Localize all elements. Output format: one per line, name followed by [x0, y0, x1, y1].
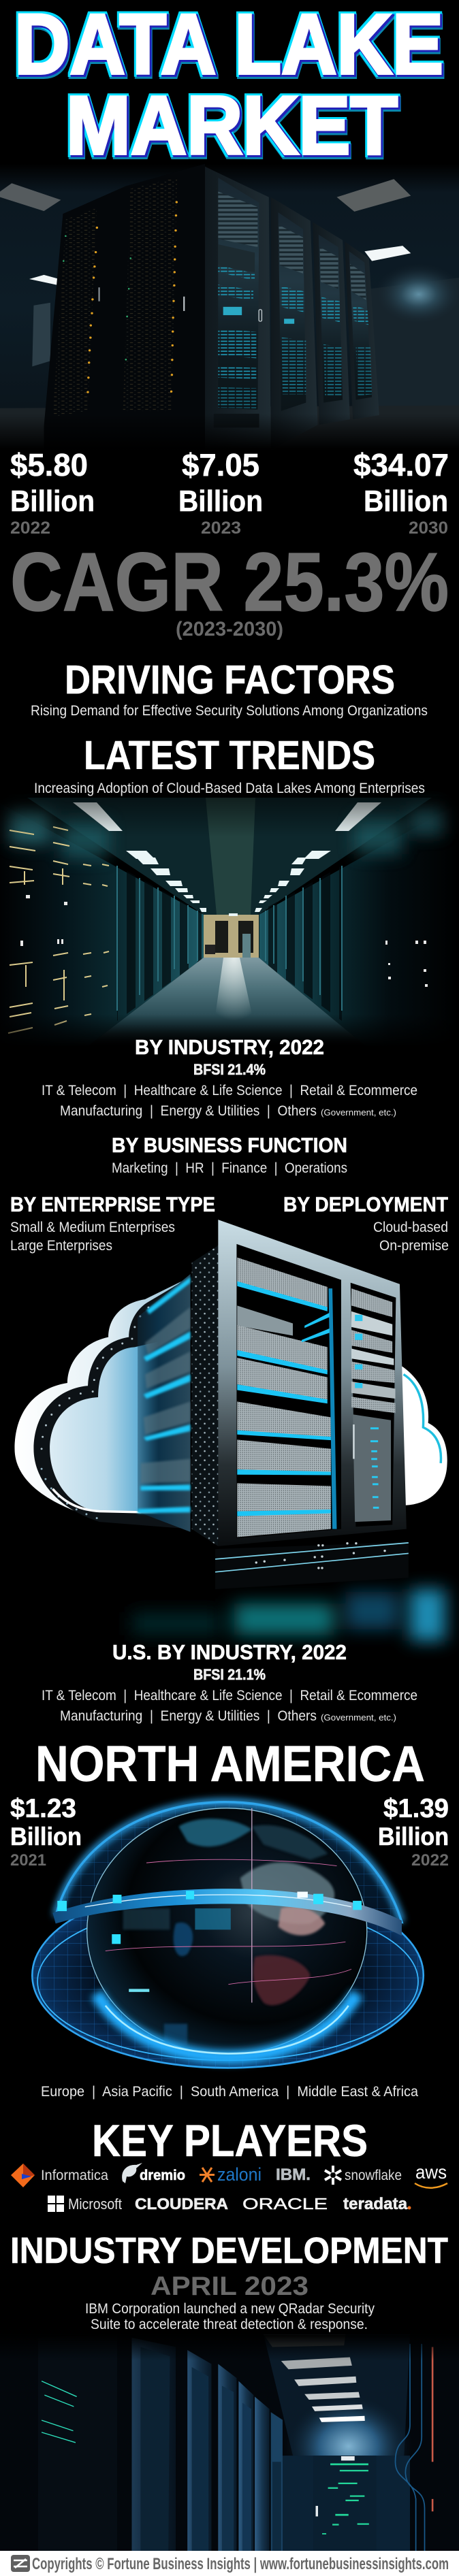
by enterprise type: BY ENTERPRISE TYPE: [10, 1192, 215, 1216]
industry development: Suite to accelerate threat detection & response.: [91, 2317, 368, 2332]
U.S. by industry 2022: U.S. BY INDUSTRY, 2022: [112, 1640, 347, 1664]
stat: 2023 market size: 2023: [201, 519, 241, 538]
stat: 2022 market size: $5.80: [10, 447, 88, 483]
logo: Snowflake: snowflake: [345, 2168, 402, 2183]
by business function: BY BUSINESS FUNCTION: [112, 1133, 347, 1157]
bottom image: server aisle: [0, 2334, 459, 2551]
rack column lines: [117, 866, 342, 1011]
teal glow on rack tops: [10, 806, 443, 858]
stat: 2022 north america: $1.39: [383, 1794, 449, 1823]
logo: Cloudera: CLOUDERA: [135, 2195, 228, 2213]
logo: Informatica: Informatica: [41, 2168, 108, 2183]
by industry 2022: Manufacturing | Energy & Utilities | Others: [60, 1103, 317, 1119]
left cloud: [15, 1277, 191, 1529]
by industry 2022: BY INDUSTRY, 2022: [135, 1035, 324, 1059]
illustration: cloud and server rack: [15, 1220, 447, 1641]
logo: AWS: aws: [415, 2162, 447, 2183]
illustration: holographic globe: [32, 1802, 424, 2068]
stat: 2021 north america: $1.23: [10, 1794, 76, 1823]
logo: Informatica: [11, 2164, 108, 2187]
amber rack LEDs: [8, 827, 109, 1033]
stat: 2022 market size: Billion: [10, 485, 95, 518]
server side depth: [138, 1274, 191, 1532]
by industry 2022: (Government, etc.): [321, 1107, 396, 1118]
rack 2: [271, 197, 318, 450]
stat: 2022 north america: [378, 1794, 449, 1870]
by industry 2022: IT & Telecom | Healthcare & Life Science | Retail & Ecommerce: [42, 1083, 417, 1098]
rear rack door: [313, 2456, 377, 2551]
hero image: server racks room: [0, 164, 459, 450]
stat: 2030 market size: Billion: [364, 485, 448, 518]
latest trends: [34, 733, 425, 796]
stat: 2030 market size: $34.07: [353, 447, 449, 483]
U.S. by industry 2022: BFSI 21.1%: [193, 1666, 266, 1683]
stat: 2023 market size: Billion: [178, 485, 263, 518]
stat: 2022 market size: [10, 447, 95, 538]
U.S. by industry 2022: IT & Telecom | Healthcare & Life Science | Retail & Ecommerce: [42, 1688, 417, 1703]
logo: zaloni: [200, 2164, 262, 2185]
racks: [38, 2334, 283, 2551]
by enterprise type: Large Enterprises: [10, 1238, 112, 1254]
stat: 2021 north america: Billion: [10, 1823, 82, 1851]
title: Data Lake Market: MARKET: [66, 79, 398, 172]
industry development: [10, 2230, 448, 2332]
ceiling lights: [73, 802, 381, 916]
stat: 2023 market size: $7.05: [182, 447, 259, 483]
driving factors: DRIVING FACTORS: [65, 657, 395, 702]
stat: 2022 market size: 2022: [10, 519, 50, 538]
stat: 2021 north america: [10, 1794, 82, 1870]
by deployment: [283, 1192, 449, 1254]
other regions: Europe | Asia Pacific | South America | Middle East & Africa: [41, 2084, 418, 2100]
by enterprise type: [10, 1192, 215, 1254]
key players heading: KEY PLAYERS: [92, 2115, 368, 2166]
stat: 2030 market size: [353, 447, 449, 538]
industry development: APRIL 2023: [151, 2272, 308, 2301]
north america heading: NORTH AMERICA: [35, 1735, 425, 1792]
by industry 2022: BFSI 21.4%: [193, 1061, 266, 1078]
rack 4: [345, 242, 379, 419]
teal light strips: [42, 2381, 77, 2443]
latest trends: Increasing Adoption of Cloud-Based Data Lakes Among Enterprises: [34, 781, 425, 796]
server slats: [237, 1258, 336, 1537]
right cloud: [401, 1366, 447, 1505]
stat: 2022 north america: 2022: [411, 1851, 449, 1870]
logo: Microsoft: [48, 2196, 122, 2213]
footer: copyright bar: [0, 2551, 459, 2576]
by deployment: On-premise: [379, 1238, 449, 1254]
rack 3: [313, 222, 350, 425]
logo: Oracle: ORACLE: [242, 2195, 328, 2213]
by industry 2022: [42, 1035, 417, 1119]
U.S. by industry 2022: [42, 1640, 417, 1724]
icon: Fortune Business Insights: [11, 2555, 30, 2572]
rack 1: [205, 167, 271, 450]
logo: Snowflake: [325, 2166, 402, 2185]
driving factors: Rising Demand for Effective Security Solutions Among Organizations: [31, 703, 428, 719]
logo: zaloni: zaloni: [217, 2164, 262, 2185]
stat: 2030 market size: 2030: [409, 519, 448, 538]
stat: 2021 north america: 2021: [10, 1851, 46, 1870]
CAGR figure: (2023-2030): [176, 618, 283, 640]
industry development: IBM Corporation launched a new QRadar Security: [85, 2301, 375, 2317]
logo: Teradata: teradata: [343, 2195, 408, 2213]
bottom glow crescent: [97, 1993, 358, 2057]
upper dome: [56, 1802, 402, 1922]
logo: IBM: IBM.: [276, 2166, 311, 2184]
title: Data Lake Market: [14, 0, 443, 172]
driving factors: [31, 657, 428, 719]
U.S. by industry 2022: (Government, etc.): [321, 1712, 396, 1723]
U.S. by industry 2022: Manufacturing | Energy & Utilities | Others: [60, 1708, 317, 1724]
lower bowl: [32, 1882, 424, 2068]
stat: 2023 market size: [178, 447, 263, 538]
stat: 2022 north america: Billion: [378, 1823, 449, 1851]
server base: [215, 1542, 409, 1589]
ceiling lights: [264, 2334, 365, 2422]
latest trends: LATEST TRENDS: [84, 733, 375, 778]
by business function: Marketing | HR | Finance | Operations: [112, 1160, 347, 1176]
land masses: [106, 1808, 351, 2045]
logo: dremio: [122, 2163, 185, 2183]
equatorial ring: [52, 1889, 402, 1936]
sphere: [87, 1808, 367, 2054]
cables at right: [395, 2344, 425, 2551]
by business function: [112, 1133, 347, 1176]
key player logos: [11, 2162, 447, 2213]
by deployment: Cloud-based: [373, 1220, 448, 1235]
reflection glow: [132, 1589, 445, 1641]
by enterprise type: Small & Medium Enterprises: [10, 1220, 175, 1235]
logo: dremio: dremio: [140, 2168, 185, 2183]
logo: Microsoft: Microsoft: [68, 2196, 122, 2213]
server frame: [218, 1220, 407, 1546]
amber LEDs: [86, 201, 178, 393]
small white rack LEDs: [20, 895, 428, 987]
corridor image: [0, 796, 459, 1047]
